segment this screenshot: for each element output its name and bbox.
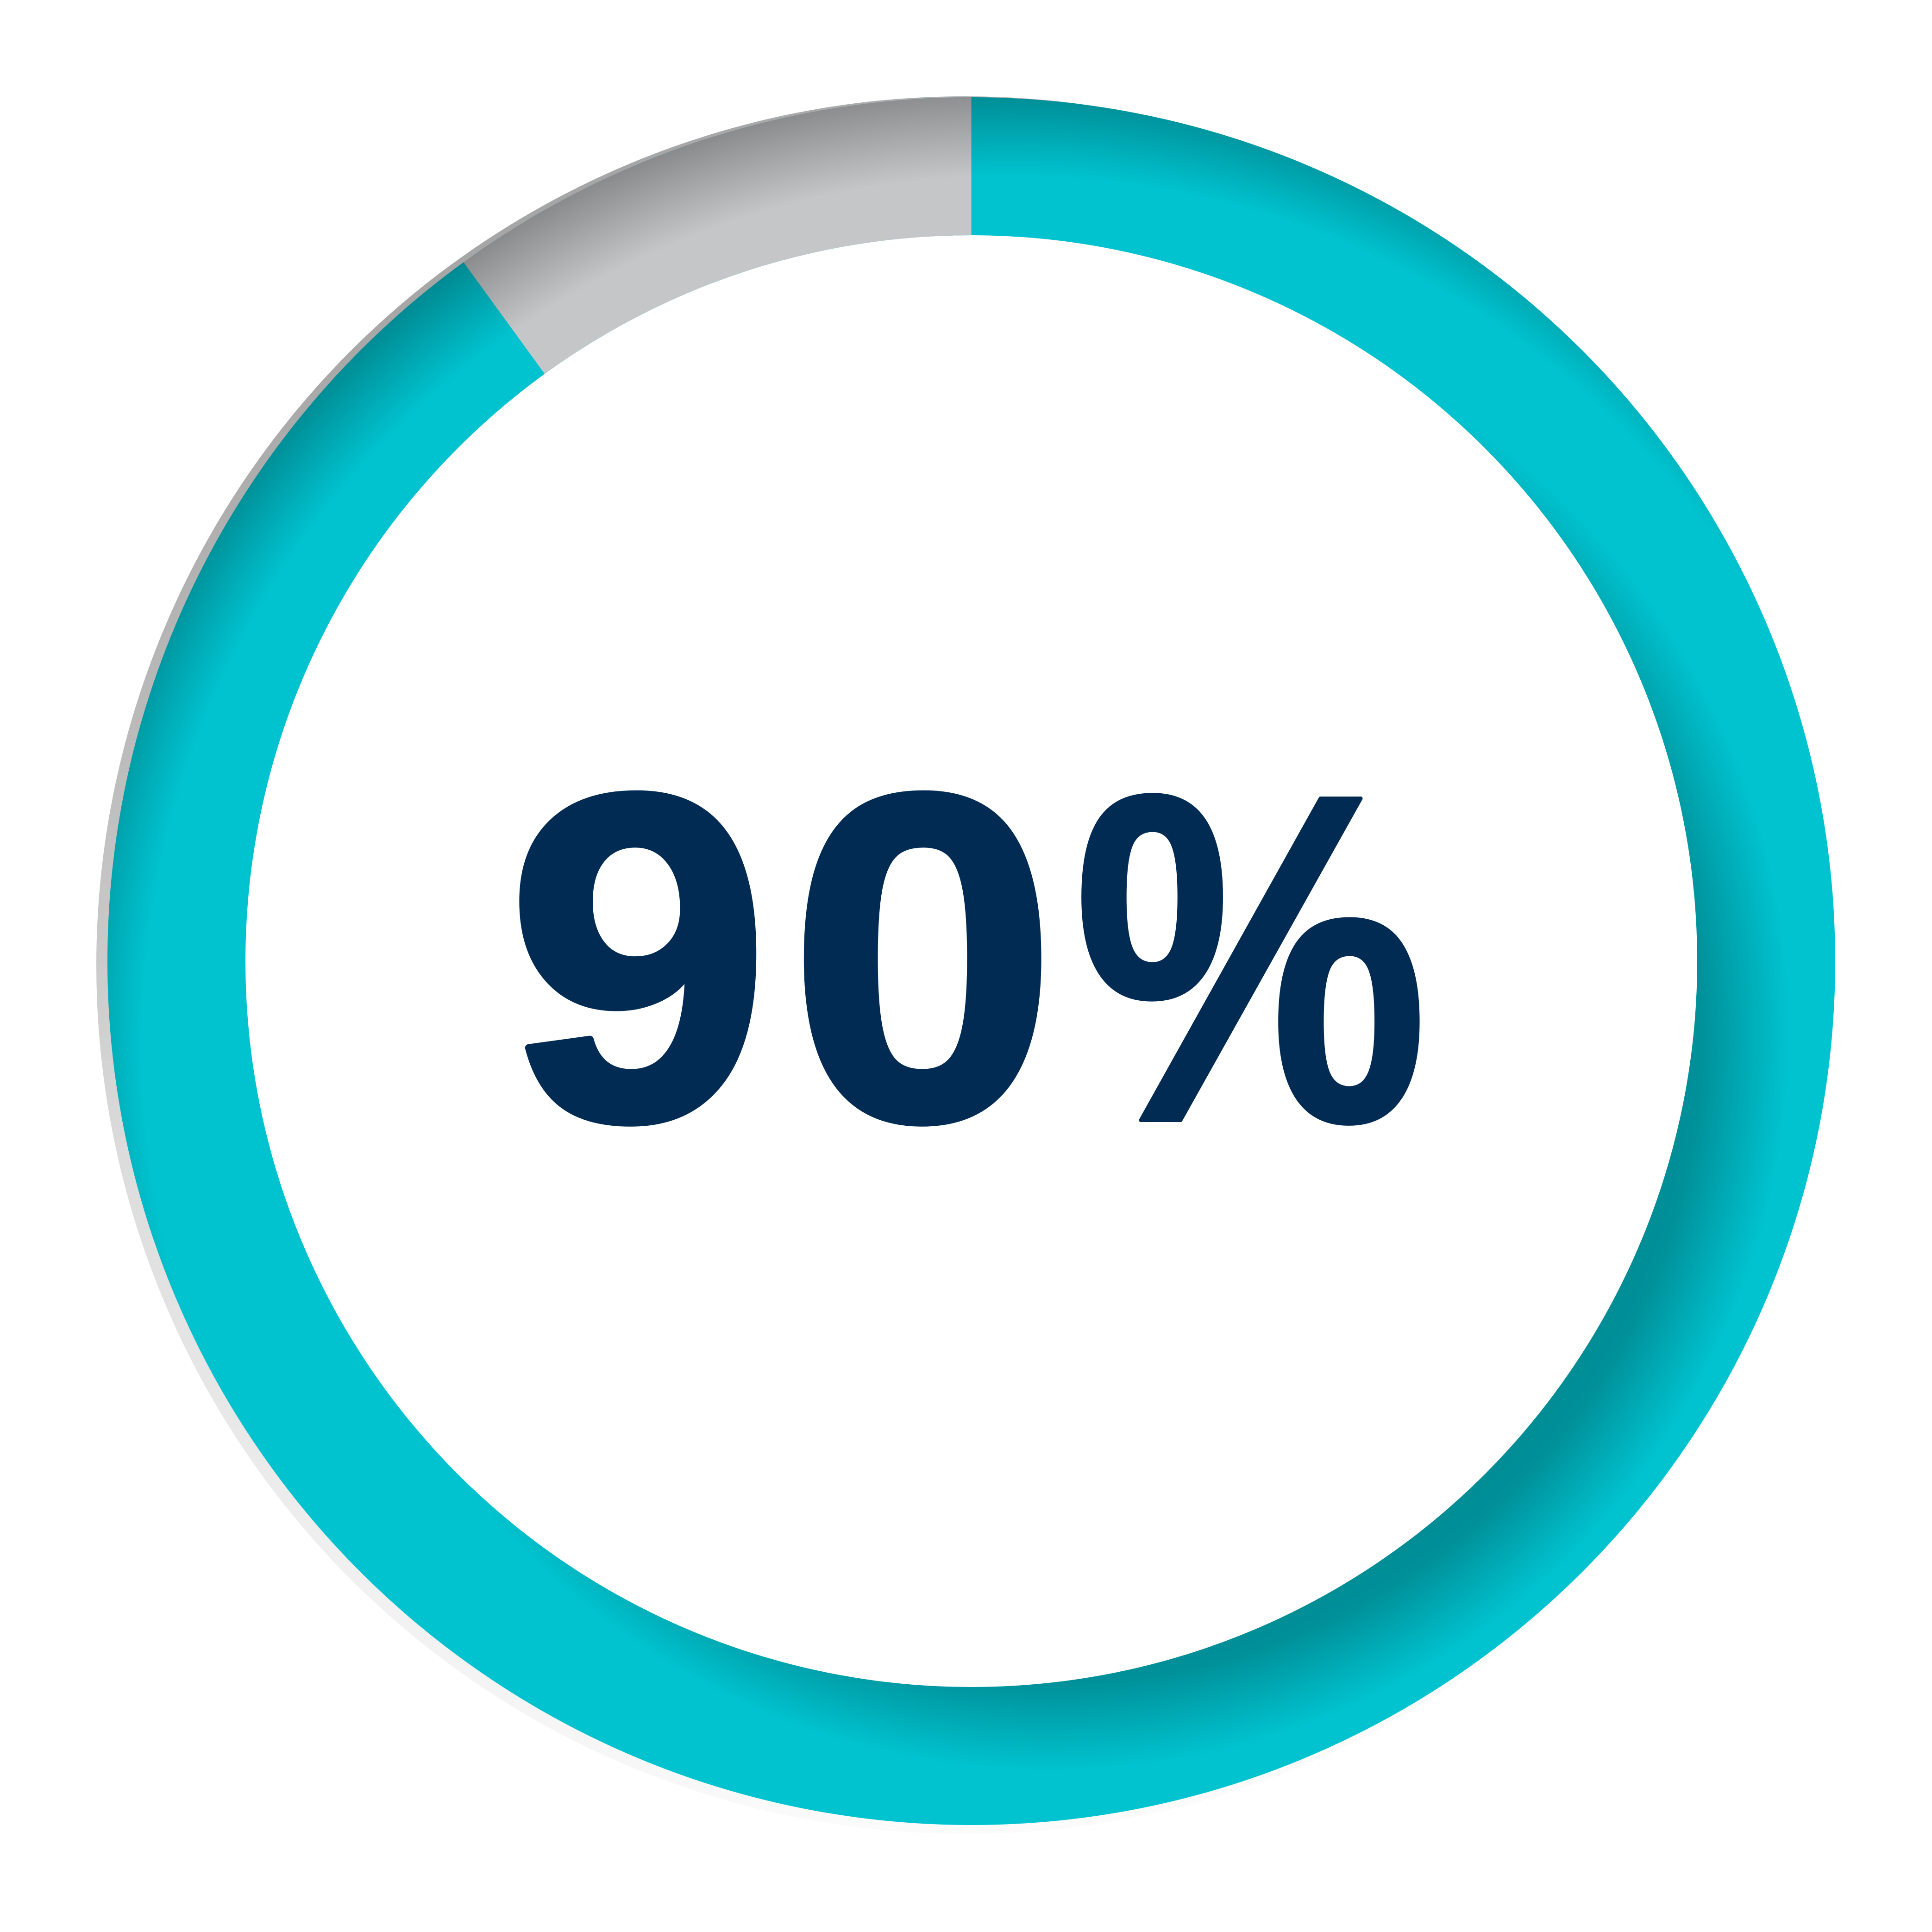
ring: full teal track bbox=[107, 97, 1835, 1825]
ring shading: outer edge upper left bbox=[107, 97, 1835, 1825]
ring shading: inner edge lower right bbox=[107, 97, 1835, 1825]
digit 9: 9 bbox=[507, 698, 770, 1217]
percent sign: % bbox=[1073, 697, 1429, 1220]
white center disc bbox=[245, 235, 1697, 1687]
center value: 90% bbox=[507, 697, 1429, 1220]
ring: gray remaining 10% segment bbox=[464, 97, 972, 374]
digit 0: 0 bbox=[789, 698, 1057, 1217]
